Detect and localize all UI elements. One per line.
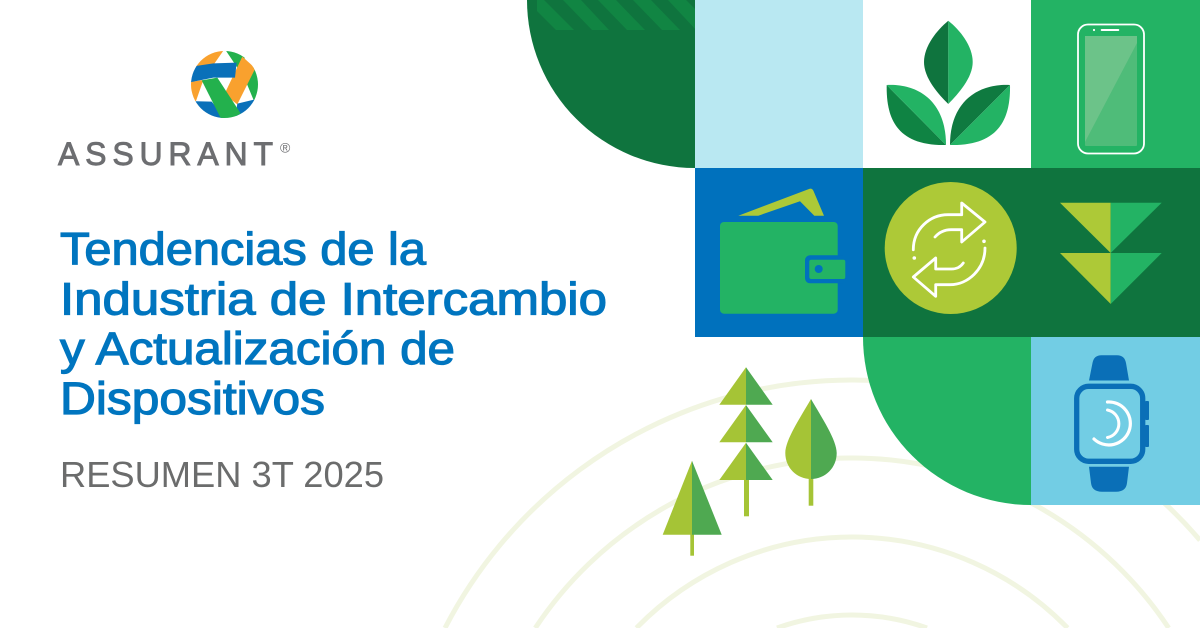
icon: wallet paper	[738, 189, 824, 216]
panel: smartwatch	[1031, 337, 1200, 505]
title	[60, 223, 607, 424]
icon: middle tiered tree	[719, 367, 773, 516]
icon: sync arrows	[885, 182, 1017, 314]
icon: right leaf	[950, 85, 1010, 145]
logo: Assurant	[58, 48, 291, 172]
background concentric arcs	[445, 380, 1200, 628]
icon: wallet body	[720, 222, 838, 314]
title: Tendencias de la	[60, 223, 427, 274]
subtitle: RESUMEN 3T 2025	[60, 454, 384, 495]
panel: phone	[1031, 0, 1200, 168]
title: y Actualización de	[60, 323, 455, 374]
panel: dark green band	[863, 168, 1200, 337]
icon: phone	[1078, 24, 1144, 154]
registered mark: ®	[280, 140, 291, 156]
panel: plant leaves	[863, 0, 1031, 168]
icon: leaf tree	[785, 399, 837, 506]
icon: watch	[1077, 355, 1149, 492]
icon: left pine tree	[663, 461, 722, 556]
icon: double triangles	[1060, 203, 1162, 304]
panel: light blue square	[695, 0, 863, 168]
icon: top leaf	[924, 21, 973, 104]
title: Dispositivos	[60, 373, 325, 424]
wordmark: ASSURANT	[58, 136, 273, 172]
panel: dark green quarter circle with stripes	[527, 0, 696, 168]
icon: left leaf	[887, 85, 946, 145]
title: Industria de Intercambio	[60, 273, 607, 324]
panel: green quarter circle	[863, 337, 1031, 505]
trees	[663, 367, 837, 556]
panel: wallet	[695, 168, 863, 337]
logo mark	[191, 51, 258, 118]
icon: wallet clasp	[805, 255, 847, 283]
